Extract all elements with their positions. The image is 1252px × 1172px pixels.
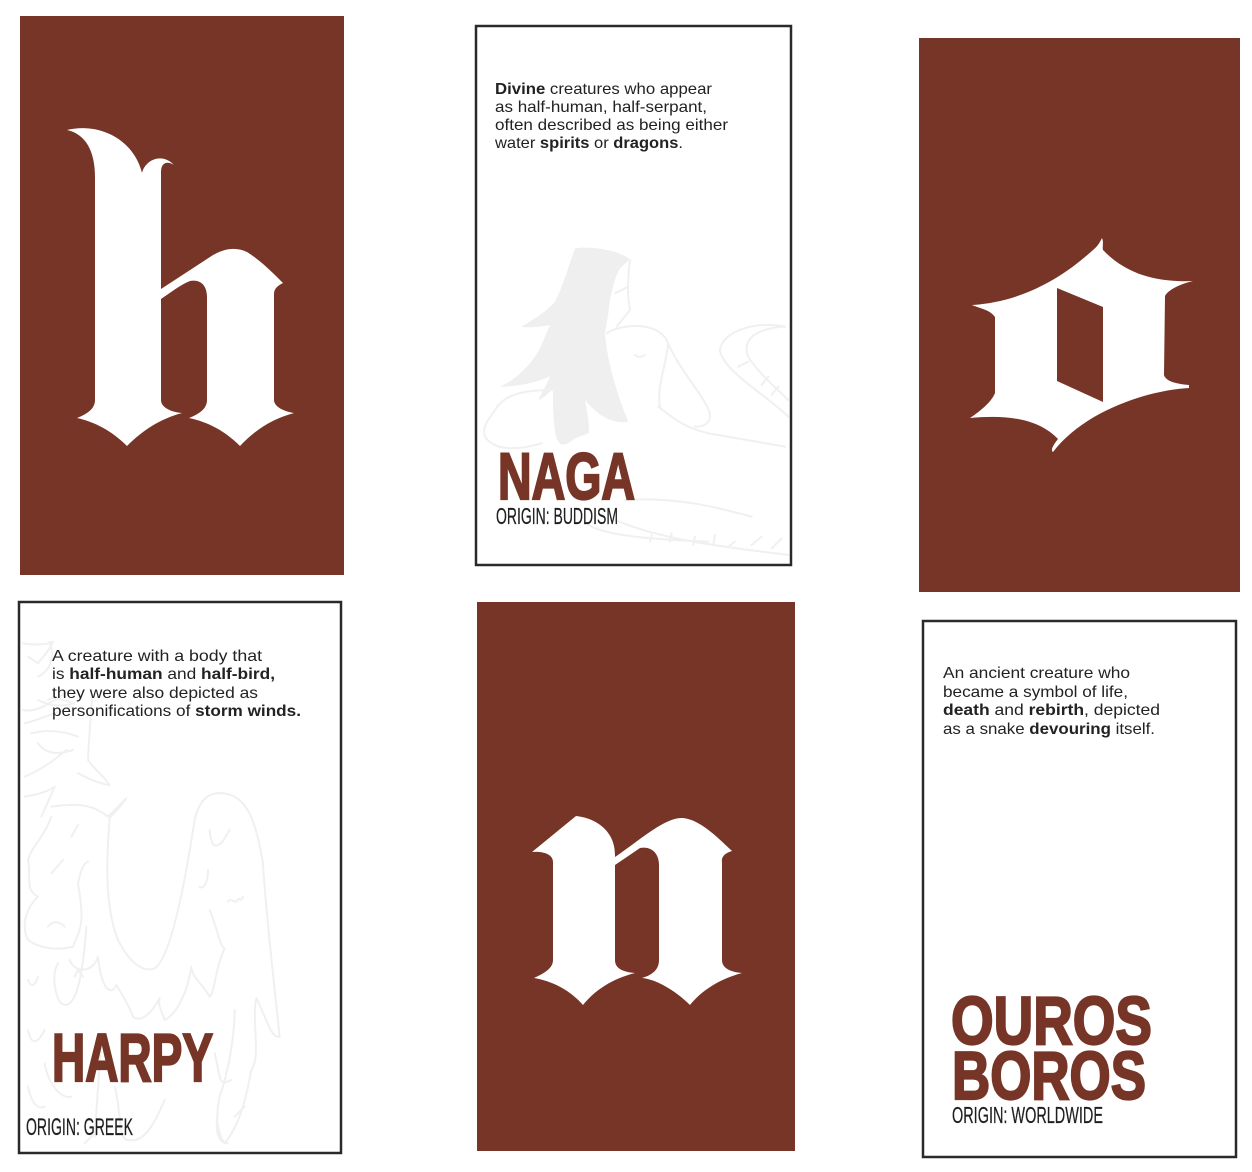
text: ouroboros description: became a symbol of life, [943,684,1128,701]
panel: letter o [919,38,1240,592]
text: naga description: water spirits or dragons. [494,135,683,152]
illustration: naga watermark [484,248,788,555]
text: naga description: as half-human, half-serpant, [495,99,707,116]
title: naga: NAGA [498,439,635,513]
caption: ouroboros origin: ORIGIN: WORLDWIDE [952,1102,1103,1128]
title: harpy: HARPY [52,1020,213,1096]
caption: harpy origin: ORIGIN: GREEK [26,1114,133,1141]
text: harpy description: personifications of storm winds. [52,703,301,720]
text: harpy description [52,648,301,720]
caption: naga origin: ORIGIN: BUDDISM [496,503,618,529]
panel: naga card [476,26,791,565]
panel: ouroboros card [923,621,1236,1157]
panel: letter n [477,602,795,1151]
text: harpy description: is half-human and half-bird, [52,666,275,683]
icon: blackletter o [970,238,1193,452]
text: naga description: often described as being either [495,117,729,134]
text: harpy description: A creature with a body that [52,648,263,665]
text: ouroboros description: An ancient creature who [943,665,1130,682]
icon: blackletter h [67,128,294,446]
text: naga description: Divine creatures who appear [495,81,713,98]
panel: letter h [20,16,344,575]
title: ouros boros: OUROS [951,983,1152,1059]
text: ouroboros description: as a snake devouring itself. [943,721,1155,738]
text: ouroboros description [943,665,1160,738]
text: naga description [494,81,729,152]
icon: blackletter n [532,816,742,1005]
text: harpy description: they were also depicted as [52,685,258,702]
title: ouros boros: BOROS [952,1038,1146,1114]
text: ouroboros description: death and rebirth , depicted [943,702,1160,719]
panel: harpy card [19,602,341,1153]
illustration: harpy watermark [23,642,280,1143]
title: ouros boros [951,983,1152,1114]
